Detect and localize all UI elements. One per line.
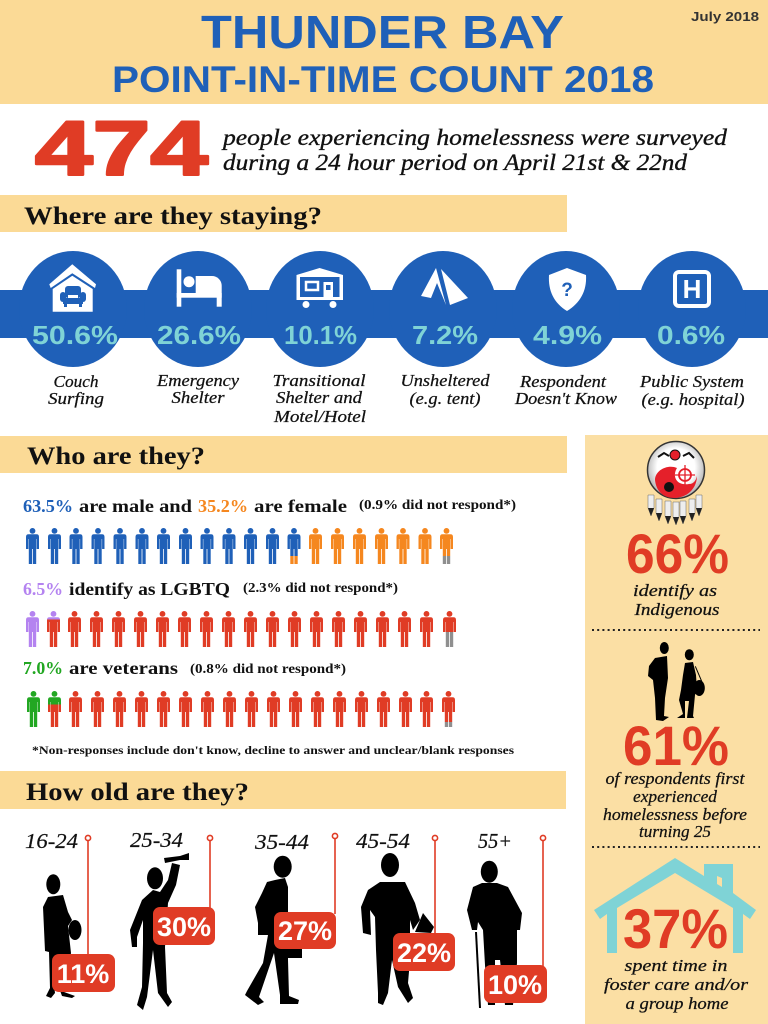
headline statistic 474: [35, 106, 728, 192]
stat: 61 percent: 61%: [623, 714, 729, 777]
stat text: first experienced: [603, 769, 747, 841]
icon: shield with question mark: [549, 268, 586, 311]
gender statement: [23, 496, 516, 516]
shelter labels: Motel/Hotel: [273, 407, 366, 426]
stat text: foster care: spent time in: [624, 956, 728, 975]
shelter labels: [48, 371, 745, 426]
shelter labels: Unsheltered: [400, 371, 490, 390]
icon: tent: [421, 268, 468, 305]
percentages: 50.6%: [32, 320, 118, 350]
headline description: people experiencing homelessness were surveyed: [221, 125, 728, 150]
age 25-34: [130, 828, 215, 1010]
age 55+: [467, 829, 547, 1008]
stat text: foster care: [604, 956, 748, 1013]
panel: age groups: [25, 828, 547, 1010]
title: THUNDER BAY: [201, 6, 564, 58]
percentages: [32, 320, 725, 350]
age 16-24: [25, 829, 115, 998]
headline description: during a 24 hour period on April 21st & 22nd: [223, 150, 688, 175]
age 35-44: 27%: [278, 916, 332, 946]
stat text: first experienced: of respondents first: [606, 769, 746, 788]
stat: 37 percent: 37%: [623, 897, 728, 960]
footnote: *Non-responses include don't know, decline to answer and unclear/blank responses: [32, 743, 514, 757]
LGBTQ statement: (2.3% did not respond*): [243, 580, 398, 595]
headline description: [221, 125, 728, 175]
icon: house outline: [594, 858, 756, 953]
stat text: foster care: a group home: [626, 994, 729, 1013]
icon: shield with question mark: ?: [561, 280, 573, 301]
veterans statement: [23, 658, 346, 678]
headline statistic 474: 474: [35, 106, 208, 192]
heading: who are they: [0, 436, 567, 473]
shelter labels: Emergency: [156, 371, 239, 390]
age 16-24: 16-24: [25, 829, 79, 853]
percentages: 0.6%: [657, 320, 725, 350]
shelter labels: Shelter: [172, 388, 225, 407]
percentages: 26.6%: [157, 320, 241, 350]
shelter labels: Shelter and: [276, 388, 363, 407]
stat text: indigenous: [633, 581, 720, 619]
icon: couple silhouettes: [648, 642, 705, 721]
stat text: indigenous: identify as: [633, 581, 717, 600]
stat text: indigenous: Indigenous: [633, 600, 720, 619]
veterans statement: (0.8% did not respond*): [190, 661, 346, 676]
stat text: first experienced: experienced: [633, 787, 717, 806]
pictogram: LGBTQ: [26, 611, 456, 647]
percentages: 10.1%: [284, 320, 357, 350]
LGBTQ statement: 6.5%: [23, 579, 63, 599]
shelter labels: Respondent: [519, 372, 607, 391]
age 35-44: [245, 830, 338, 1005]
pictogram: veterans: [27, 691, 455, 727]
age 45-54: 22%: [397, 938, 451, 968]
pictogram: male and female: [26, 528, 453, 564]
subtitle: POINT-IN-TIME COUNT 2018: [112, 59, 654, 100]
date: July 2018: [691, 9, 759, 24]
icon: indigenous emblem: [648, 442, 704, 525]
shelter labels: Doesn't Know: [514, 389, 618, 408]
icon: bed: [177, 269, 222, 307]
shelter labels: Surfing: [48, 389, 104, 408]
age 16-24: 11%: [57, 959, 109, 989]
LGBTQ statement: identify as LGBTQ: [69, 579, 230, 599]
LGBTQ statement: [23, 579, 398, 599]
age 35-44: 35-44: [254, 830, 310, 854]
heading: who are they: Who are they?: [27, 443, 205, 470]
icon: mobile shelter: [296, 268, 343, 308]
shelter labels: (e.g. hospital): [642, 390, 745, 409]
shelter labels: (e.g. tent): [410, 389, 481, 408]
percentages: 7.2%: [412, 320, 478, 350]
shelter labels: Transitional: [272, 371, 366, 390]
gender statement: 35.2%: [198, 496, 248, 516]
age 55+: 10%: [488, 970, 542, 1000]
panel: where they are staying band: [0, 251, 768, 367]
shelter labels: Couch: [54, 372, 98, 391]
icon: house with armchair: [49, 264, 96, 312]
icon: hospital sign: [675, 272, 709, 306]
stat text: foster care: foster care and/or: [604, 975, 748, 994]
icon: hospital sign: H: [683, 274, 701, 304]
veterans statement: 7.0%: [23, 658, 63, 678]
gender statement: are female: [254, 496, 347, 516]
age 45-54: [356, 829, 455, 1005]
stat text: first experienced: homelessness before: [603, 805, 747, 824]
panel: right column statistics: [585, 435, 768, 1024]
age 25-34: 30%: [157, 912, 211, 942]
veterans statement: are veterans: [69, 658, 178, 678]
gender statement: (0.9% did not respond*): [359, 497, 516, 512]
age 55+: 55+: [478, 829, 512, 853]
heading: where are they staying: Where are they staying?: [24, 203, 322, 230]
stat: 66 percent: 66%: [626, 522, 729, 585]
age 45-54: 45-54: [356, 829, 411, 853]
stat text: first experienced: turning 25: [639, 822, 711, 841]
gender statement: are male and: [79, 496, 192, 516]
percentages: 4.9%: [533, 320, 602, 350]
shelter labels: Public System: [639, 372, 744, 391]
heading: where are they staying: [0, 195, 567, 232]
heading: how old are they: How old are they?: [26, 779, 249, 806]
heading: how old are they: [0, 771, 566, 809]
header banner: [0, 0, 768, 104]
age 25-34: 25-34: [130, 828, 184, 852]
gender statement: 63.5%: [23, 496, 73, 516]
